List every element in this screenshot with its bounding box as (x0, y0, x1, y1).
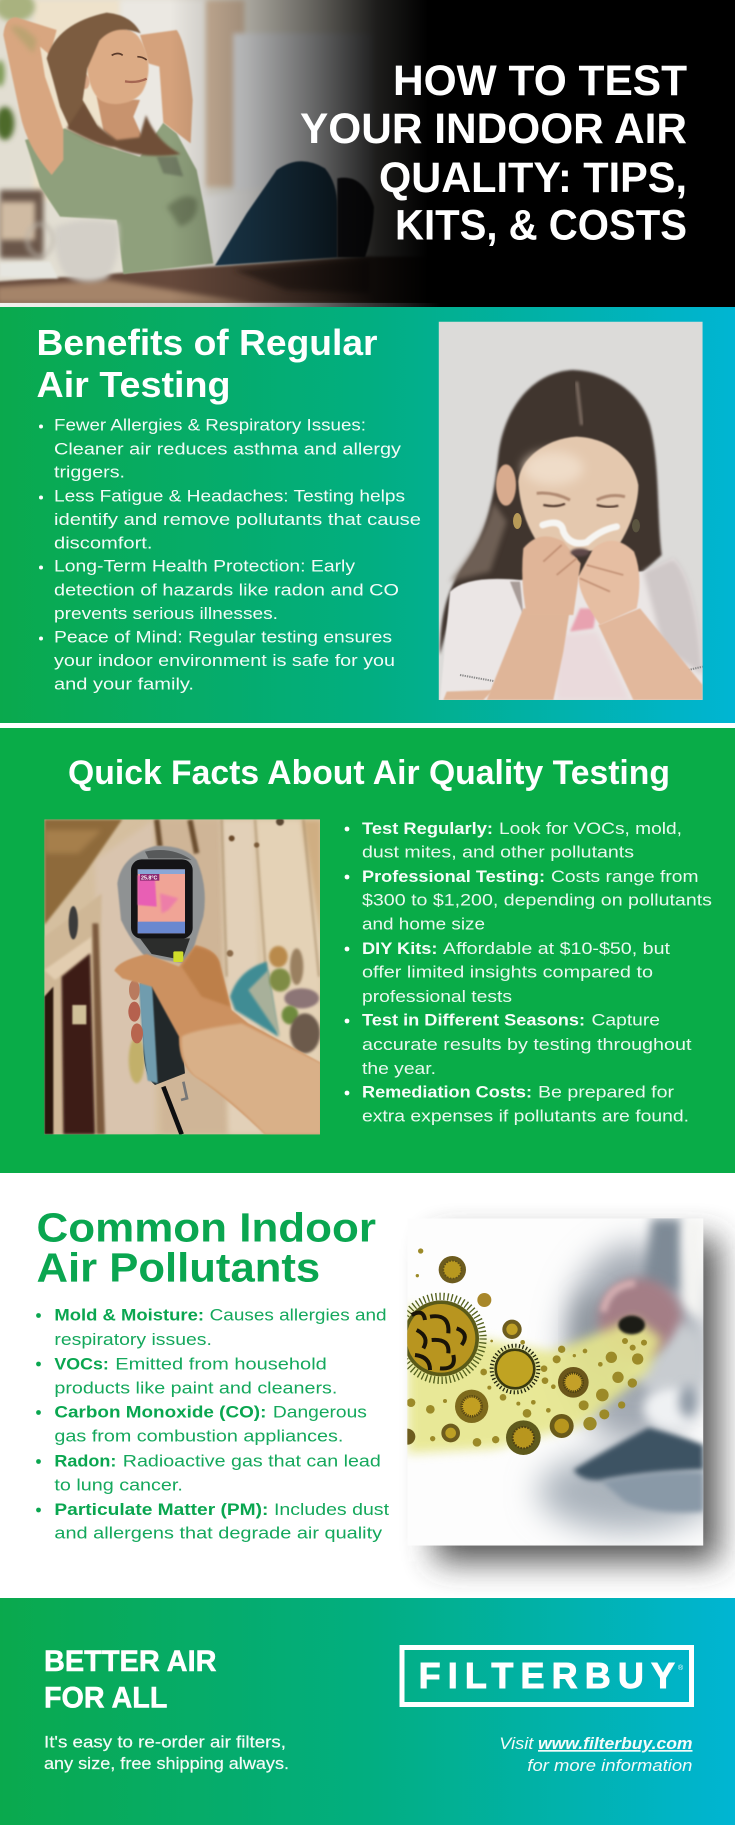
bullet list: quick facts: DIY Kits: (362, 939, 438, 958)
text: visit website: www.filterbuy.com (538, 1734, 692, 1753)
panel: hero header (0, 0, 735, 303)
photo: girl sneezing into tissue (439, 322, 703, 700)
jeans (215, 161, 337, 266)
bullet list: pollutants: Carbon Monoxide (CO): (54, 1403, 266, 1422)
hair (47, 13, 141, 135)
bullet list: benefits (39, 416, 421, 694)
tagline: BETTER AIR (44, 1645, 217, 1678)
bullet list: quick facts: Costs range from (551, 867, 698, 886)
bullet list: pollutants: Radon: (54, 1452, 116, 1471)
bullet list: pollutants: Dangerous (273, 1403, 367, 1422)
door frame (44, 937, 92, 980)
heading: pollutants: Common Indoor (36, 1205, 376, 1251)
bullet list: quick facts (345, 819, 712, 1126)
title: QUALITY: TIPS, (379, 154, 687, 202)
bullet list: quick facts: the year. (362, 1059, 436, 1078)
panel: quick facts (0, 728, 735, 1173)
photo: handheld thermal air quality meter: 25.8°C (141, 875, 157, 881)
heading: pollutants: Air Pollutants (36, 1245, 320, 1291)
panel: footer (0, 1598, 735, 1825)
bullet list: benefits: triggers. (54, 463, 125, 482)
bullet list: benefits: identify and remove pollutants that cause (54, 510, 421, 529)
pollen stream (407, 1305, 662, 1453)
shirt (440, 558, 703, 700)
bullet list: quick facts: Test in Different Seasons: (362, 1011, 585, 1030)
bullet list: benefits: Long-Term Health Protection: Early (54, 557, 356, 576)
heading: benefits: Benefits of Regular (36, 322, 378, 363)
title: HOW TO TEST (393, 57, 687, 105)
bullet list: pollutants (36, 1306, 389, 1543)
panel: benefits of regular air testing (0, 307, 735, 723)
bullet list: pollutants: respiratory issues. (54, 1330, 212, 1349)
text: visit website: for more information (527, 1756, 692, 1775)
bullet list: quick facts: Capture (592, 1011, 660, 1030)
bullet list: pollutants: Mold & Moisture: (54, 1306, 204, 1325)
text: visit website (499, 1734, 692, 1775)
small pollen particles (407, 1248, 647, 1447)
bullet list: quick facts: Test Regularly: (362, 819, 493, 838)
bullet list: quick facts: Professional Testing: (362, 867, 545, 886)
bullet list: benefits: Cleaner air reduces asthma and allergy (54, 439, 402, 458)
lips (573, 1428, 703, 1480)
bullet list: quick facts: dust mites, and other pollutants (362, 843, 634, 862)
bullet list: quick facts: accurate results by testing throughout (362, 1035, 692, 1054)
text: re-order note: It's easy to re-order air filters, (44, 1733, 286, 1752)
heading: quick facts: Quick Facts About Air Quality Testing (68, 754, 670, 792)
title: KITS, & COSTS (395, 202, 687, 250)
text: visit website: Visit (499, 1734, 535, 1753)
arms and hands (487, 608, 570, 700)
tagline: FOR ALL (44, 1682, 167, 1715)
mug (55, 220, 119, 282)
text: re-order note (44, 1733, 289, 1773)
large pollen grain (399, 1296, 483, 1380)
dark gradient overlay (0, 0, 735, 303)
logo: Filterbuy: ® (678, 1664, 684, 1672)
ceiling (44, 819, 122, 925)
logo: Filterbuy (402, 1648, 692, 1704)
bullet list: pollutants: Particulate Matter (PM): (54, 1500, 268, 1519)
title: YOUR INDOOR AIR (300, 105, 687, 153)
hero photo: woman relaxing at a table (0, 0, 433, 303)
photo: handheld thermal air quality meter (44, 818, 322, 1134)
neck and face (96, 96, 142, 142)
shirt (25, 123, 213, 274)
bullet list: quick facts: offer limited insights compared to (362, 963, 653, 982)
bullet list: pollutants: products like paint and cleaners. (54, 1378, 337, 1397)
text: re-order note: any size, free shipping always. (44, 1754, 289, 1773)
bullet list: benefits: your indoor environment is safe for you (54, 651, 395, 670)
bullet list: quick facts: Affordable at $10-$50, but (443, 939, 670, 958)
bullet list: benefits: Less Fatigue & Headaches: Testing helps (54, 487, 405, 506)
title (300, 57, 687, 250)
bullet list: quick facts: $300 to $1,200, depending on pollutants (362, 891, 712, 910)
heading: benefits (36, 322, 378, 405)
panel: common indoor air pollutants (36, 1212, 735, 1588)
bullet list: benefits: Fewer Allergies & Respiratory Issues: (54, 416, 366, 435)
bullet list: quick facts: extra expenses if pollutants are found. (362, 1107, 689, 1126)
hand and forearm (114, 945, 322, 1134)
bullet list: pollutants: Includes dust (274, 1500, 389, 1519)
bullet list: quick facts: professional tests (362, 987, 512, 1006)
bullet list: pollutants: VOCs: (54, 1354, 109, 1373)
bullet list: benefits: detection of hazards like radon and CO (54, 581, 399, 600)
bullet list: quick facts: Be prepared for (538, 1083, 674, 1102)
photo: pollen entering a nose (399, 1218, 718, 1562)
bullet list: quick facts: Remediation Costs: (362, 1083, 532, 1102)
arms (3, 17, 63, 175)
bullet list: pollutants: Radioactive gas that can lead (123, 1452, 381, 1471)
bullet list: benefits: discomfort. (54, 533, 152, 552)
heading: benefits: Air Testing (36, 364, 231, 405)
bullet list: quick facts: and home size (362, 915, 485, 934)
bullet list: pollutants: gas from combustion appliances. (54, 1427, 343, 1446)
tagline (44, 1645, 217, 1715)
bullet list: pollutants: to lung cancer. (54, 1476, 183, 1495)
bullet list: benefits: and your family. (54, 675, 194, 694)
bullet list: quick facts: Look for VOCs, mold, (499, 819, 682, 838)
bullet list: pollutants: Emitted from household (115, 1354, 327, 1373)
heading: pollutants (36, 1205, 376, 1291)
bullet list: pollutants: and allergens that degrade air quality (54, 1524, 383, 1543)
device head (117, 846, 205, 964)
bullet list: benefits: Peace of Mind: Regular testing ensures (54, 628, 392, 647)
wall decoration (230, 962, 278, 1037)
fingers (129, 980, 140, 1000)
device handle (140, 983, 185, 1085)
bullet list: benefits: prevents serious illnesses. (54, 604, 278, 623)
medium pollen grains (399, 1256, 589, 1455)
logo: Filterbuy: FILTERBUY (419, 1655, 675, 1696)
bullet list: pollutants: Causes allergies and (210, 1306, 387, 1325)
